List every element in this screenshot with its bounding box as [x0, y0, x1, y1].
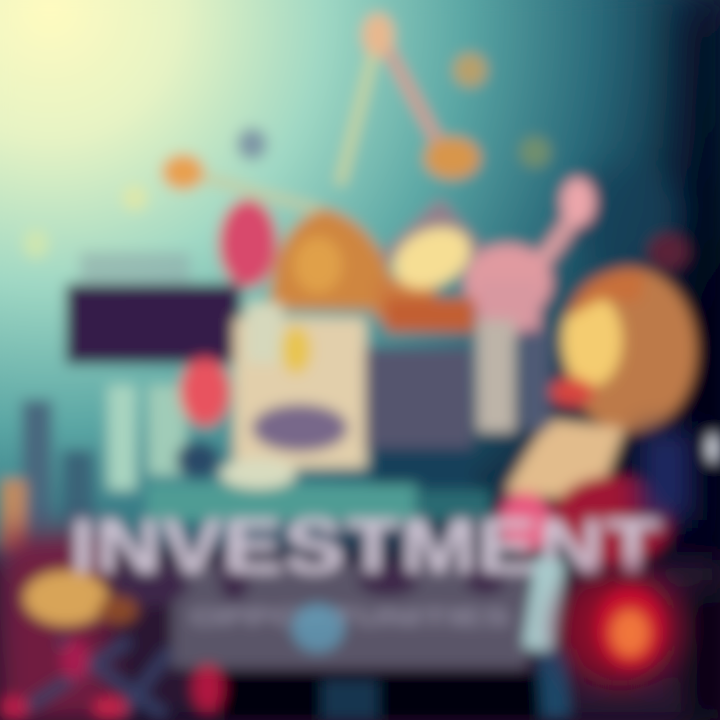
brown orange band: [385, 298, 475, 332]
red ribbon: [550, 378, 594, 406]
white spark: [708, 434, 720, 462]
dark foot: [176, 441, 220, 479]
pale blue stem: [538, 560, 550, 650]
pink spoon head: [561, 178, 595, 226]
left skyline: [0, 385, 186, 550]
cream blocks: [234, 318, 366, 468]
gold coin badge: [24, 571, 108, 625]
orange dome: [270, 208, 400, 310]
pale column: [477, 320, 515, 432]
dark teal circle behind spoon: [570, 167, 680, 263]
node: orange left: [162, 154, 204, 190]
navy block base: [372, 448, 472, 496]
dark right edge: [685, 0, 720, 720]
lower dark base: [0, 545, 720, 720]
orange joint: [375, 280, 435, 320]
dark letter shadows: [112, 549, 505, 606]
node: green right: [519, 136, 551, 168]
target icon: [558, 570, 682, 686]
node: blue: [237, 128, 267, 160]
pink ribbon: [499, 492, 551, 552]
dark purple panel: [66, 252, 241, 364]
title text: INVESTMENT: [70, 504, 660, 589]
bottom black: [220, 672, 560, 720]
node: pale left: [122, 185, 148, 211]
network lines and nodes: [23, 13, 551, 260]
pink mass: [464, 244, 552, 320]
red top dome: [552, 476, 672, 564]
node: top: [362, 13, 394, 57]
grey block: [365, 348, 472, 450]
node: top right: [453, 53, 487, 87]
right orange jar: [564, 268, 696, 432]
right navy patch: [640, 430, 692, 520]
red flower: [180, 358, 230, 426]
mauve triangle: [375, 198, 490, 260]
table teal band: [147, 459, 490, 520]
bottom left diamonds: [0, 640, 378, 720]
dark holes in cream: [252, 404, 348, 452]
node: pale far left: [23, 229, 49, 259]
title plate: [172, 565, 527, 668]
subtitle text: OPPORTUNITIES: [190, 604, 510, 631]
cream strip: [505, 420, 625, 500]
pink arm: [510, 205, 580, 290]
dark red tab: [648, 234, 688, 270]
left magenta wash: [0, 530, 110, 720]
red balloon: [219, 199, 277, 287]
dark column: [520, 330, 550, 430]
cream egg: [384, 216, 480, 300]
right black: [690, 590, 720, 720]
node: orange centre: [424, 137, 480, 179]
food cluster: [176, 178, 696, 500]
blue light: [292, 604, 344, 652]
